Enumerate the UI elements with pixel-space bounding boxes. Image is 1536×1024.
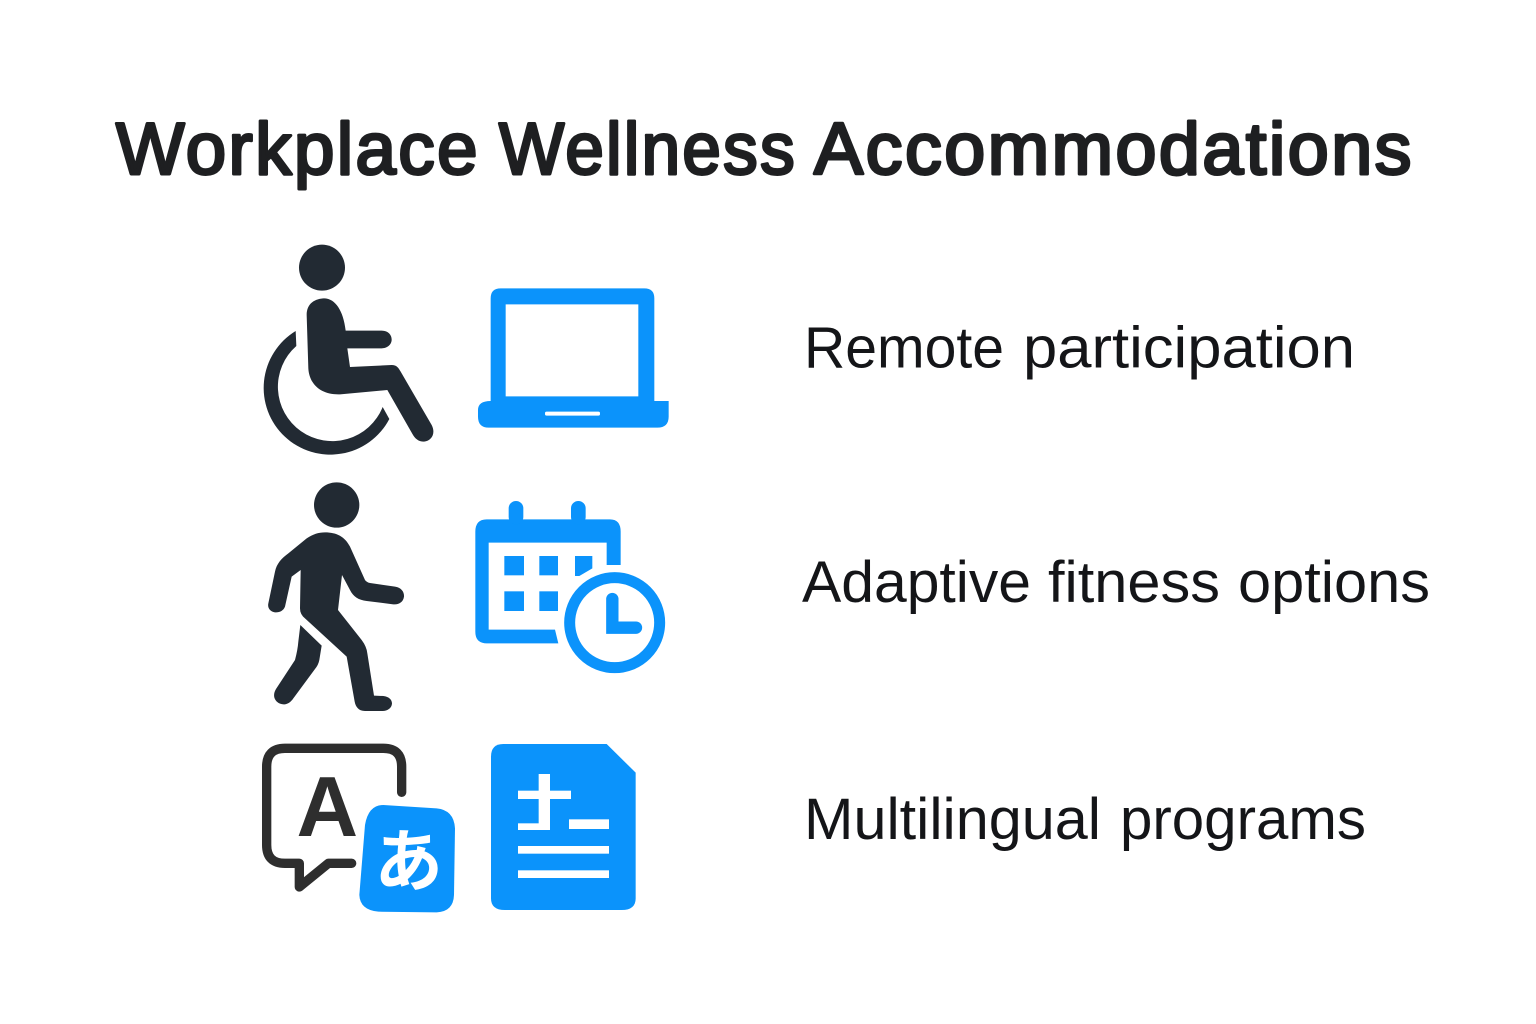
title: Accommodations	[814, 109, 1414, 190]
icon: wheelchair user	[264, 245, 433, 455]
label: multilingual programs	[804, 787, 1366, 852]
icon: calendar with clock	[475, 501, 660, 668]
label: multilingual programs: Multilingual	[804, 787, 1101, 852]
label: multilingual programs: programs	[1120, 787, 1366, 852]
label: adaptive fitness options: options	[1238, 550, 1430, 615]
title	[116, 109, 1414, 190]
label: remote participation: participation	[1023, 316, 1355, 380]
title: Workplace	[116, 109, 480, 190]
icon: translation speech bubble: A	[297, 760, 358, 855]
icon: laptop	[478, 288, 669, 428]
label: adaptive fitness options	[802, 550, 1430, 615]
row: adaptive fitness options	[268, 482, 1430, 711]
icon: translation speech bubble: あ	[374, 825, 443, 901]
row: multilingual programs	[267, 744, 1366, 912]
label: remote participation	[804, 316, 1355, 380]
icon: walking person	[268, 482, 404, 711]
title: Wellness	[499, 109, 797, 190]
row: remote participation	[264, 245, 1355, 455]
label: remote participation: Remote	[804, 316, 1004, 380]
icon: document with text lines	[491, 744, 636, 910]
label: adaptive fitness options: fitness	[1048, 550, 1220, 615]
icon: translation speech bubble	[267, 748, 455, 912]
label: adaptive fitness options: Adaptive	[802, 550, 1031, 615]
